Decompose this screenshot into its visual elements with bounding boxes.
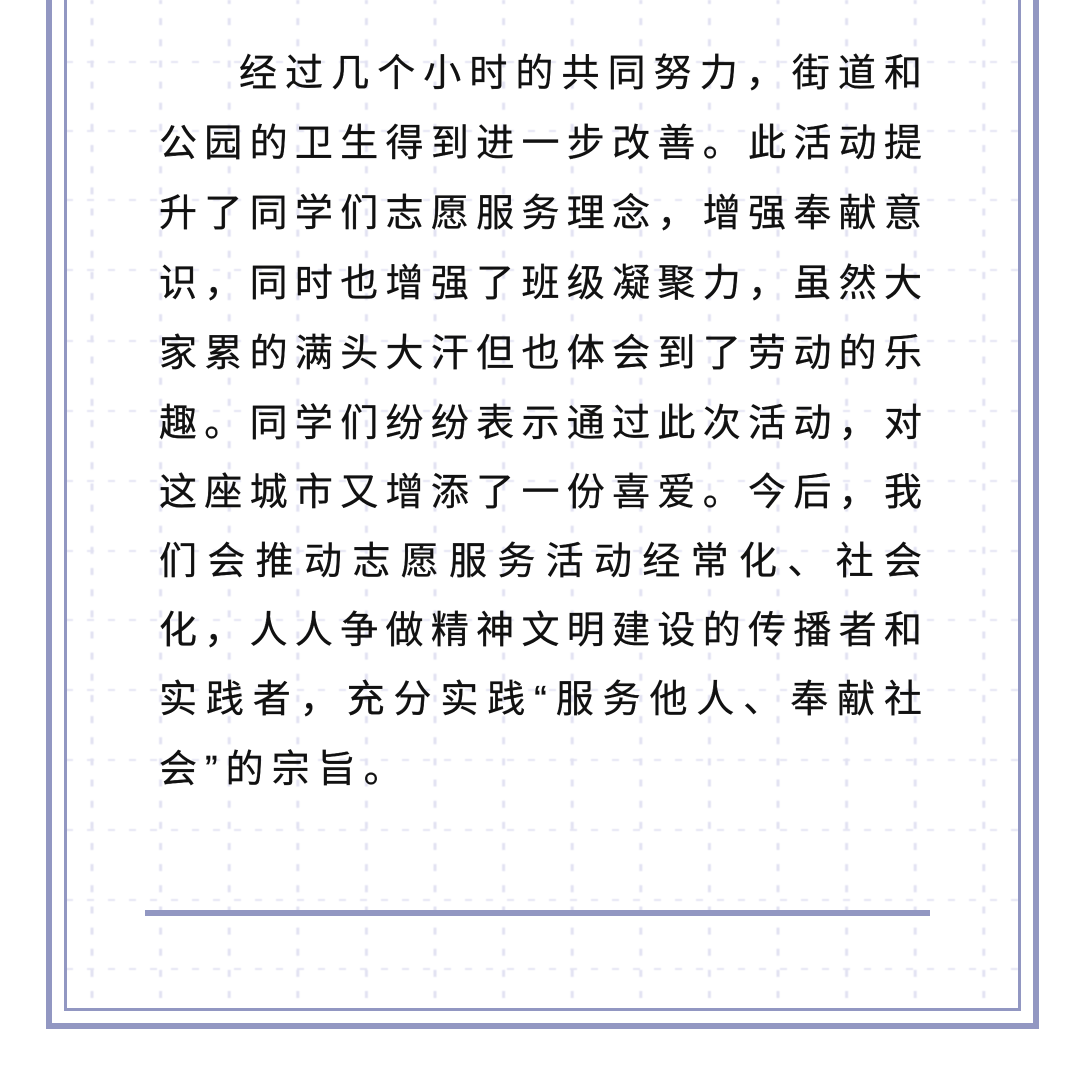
text block: closing paragraph: 公园的卫生得到进一步改善。此活动提 (159, 123, 922, 165)
text block: closing paragraph: 趣。同学们纷纷表示通过此次活动，对 (159, 403, 922, 445)
text block: closing paragraph: 经过几个小时的共同努力，街道和 (239, 53, 922, 95)
text block: closing paragraph: 化，人人争做精神文明建设的传播者和 (159, 610, 922, 652)
text block: closing paragraph: 升了同学们志愿服务理念，增强奉献意 (159, 193, 922, 235)
text block: closing paragraph: 会”的宗旨。 (159, 749, 410, 791)
divider bar (145, 910, 930, 916)
text block: closing paragraph (159, 53, 922, 791)
text block: closing paragraph: 家累的满头大汗但也体会到了劳动的乐 (159, 333, 922, 375)
text block: closing paragraph: 实践者，充分实践“服务他人、奉献社 (159, 679, 922, 721)
text block: closing paragraph: 这座城市又增添了一份喜爱。今后，我 (159, 472, 922, 514)
text block: closing paragraph: 识，同时也增强了班级凝聚力，虽然大 (159, 263, 922, 305)
text block: closing paragraph: 们会推动志愿服务活动经常化、社会 (159, 541, 922, 583)
